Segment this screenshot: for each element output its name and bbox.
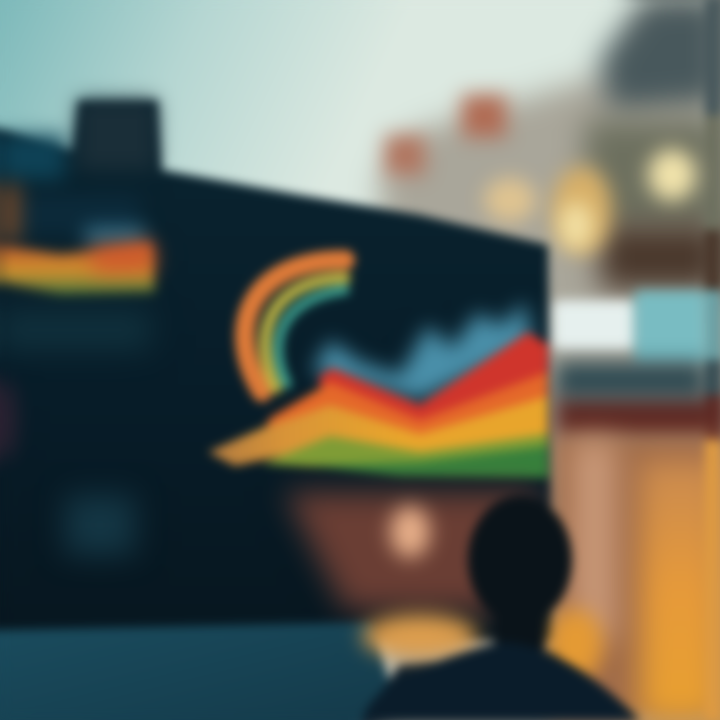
warm lower right glow bbox=[550, 435, 720, 720]
dark area behind the person's shoulders bbox=[372, 650, 560, 720]
orange band bbox=[255, 372, 548, 448]
bokeh lights bbox=[484, 149, 696, 254]
dark building wall bbox=[0, 100, 552, 640]
light cyan signs on the right bbox=[552, 290, 706, 398]
left mural rainbow band bbox=[0, 185, 155, 294]
red band bbox=[318, 332, 548, 430]
left wall shadow panels bbox=[0, 195, 150, 555]
green band bbox=[262, 434, 548, 476]
blue mountain peaks behind chart bbox=[312, 302, 532, 400]
street ground bbox=[0, 622, 400, 720]
rainbow arc bbox=[245, 260, 345, 392]
warm reflection below chart bbox=[285, 492, 540, 610]
person silhouette bbox=[362, 496, 640, 720]
yellow band bbox=[208, 396, 548, 466]
rainbow area chart bbox=[208, 332, 548, 478]
right edge colour strips bbox=[705, 0, 720, 440]
background buildings on the right bbox=[380, 0, 720, 720]
warm lights beside the person bbox=[362, 609, 603, 681]
